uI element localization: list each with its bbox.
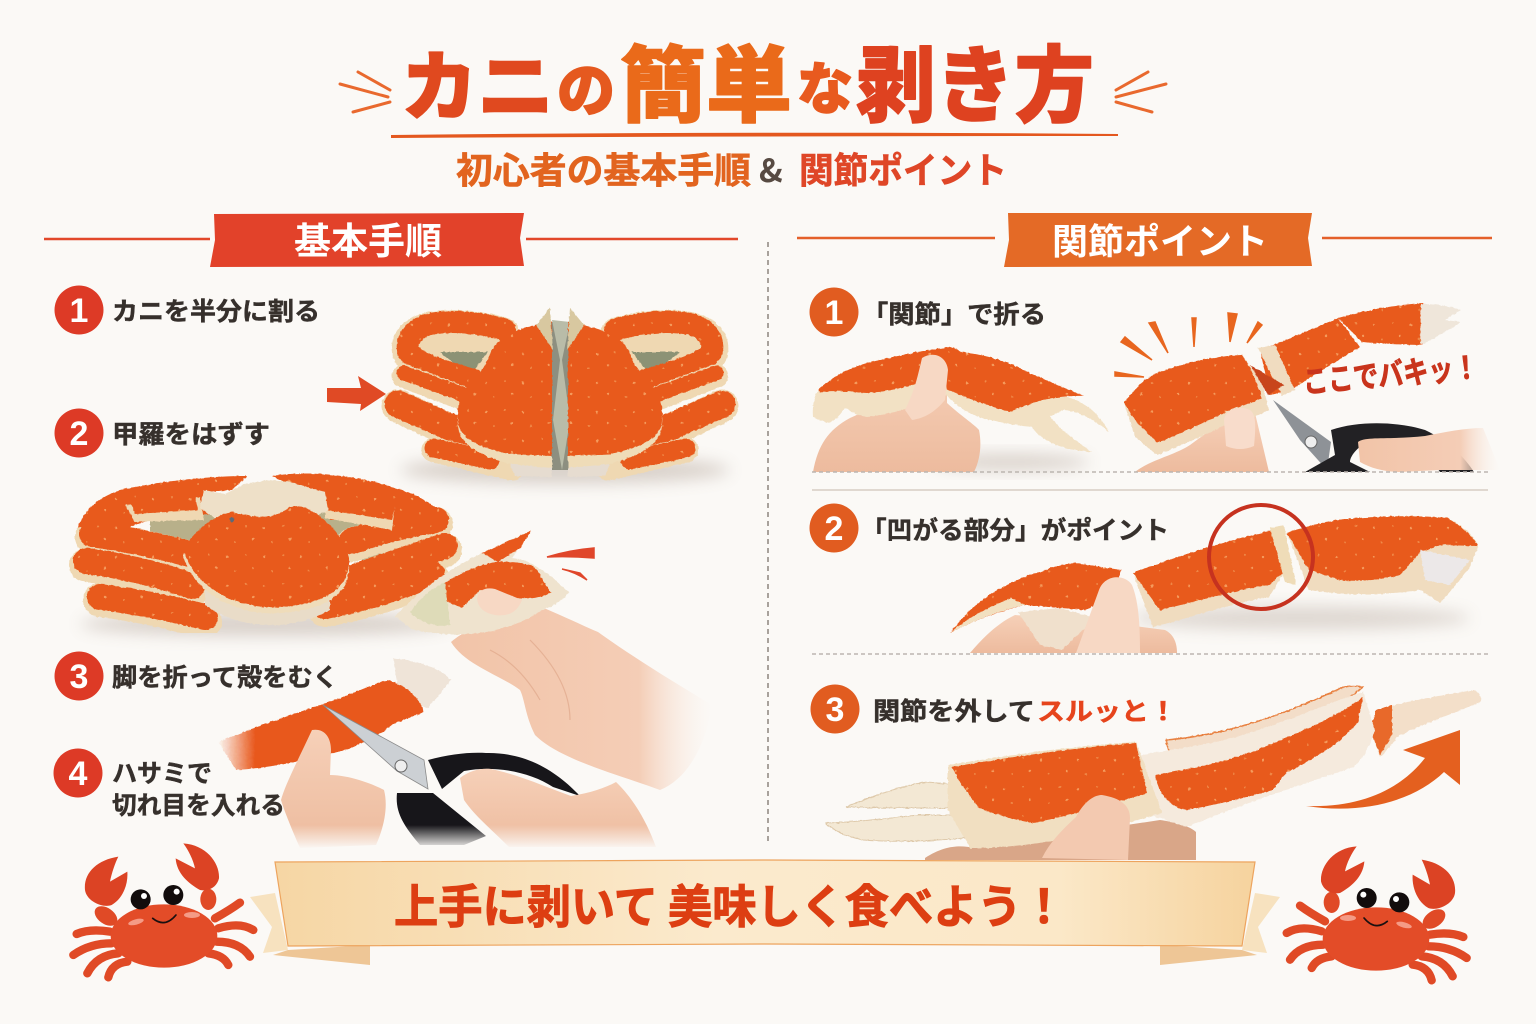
claw tips: [826, 782, 965, 841]
step 3 right: スルッと！: [1037, 692, 1177, 728]
photo: crab split in half: [398, 308, 730, 484]
heading: 関節ポイント: [1004, 213, 1312, 267]
photo: claw held by hand: [813, 347, 1109, 472]
step 3 left: [54, 652, 338, 700]
joint circle: [1209, 505, 1313, 609]
subtitle: 初心者の基本手順: [456, 142, 751, 194]
photo: hand holding claw section: [395, 531, 712, 790]
step 2 left: 甲羅をはずす: [112, 415, 270, 451]
step 1 left: [54, 286, 320, 334]
heading: 基本手順: [210, 211, 524, 267]
scissors: [1273, 400, 1331, 470]
title: [340, 19, 1166, 139]
step 3 left: 3: [70, 658, 88, 696]
photo: bending part: [950, 505, 1478, 653]
subtitle: [456, 142, 1007, 194]
arrow to split crab: [327, 376, 386, 411]
title underline: [391, 133, 1118, 138]
subtitle: &: [759, 146, 783, 192]
step 4 left: [54, 748, 285, 822]
title: 簡単: [620, 19, 792, 139]
step 3 right: 関節を外して: [873, 692, 1035, 728]
step 2 left: 2: [70, 415, 88, 453]
title: カニ: [401, 26, 554, 136]
title: 剥き方: [856, 19, 1094, 139]
step 1 right: [810, 288, 1046, 336]
subtitle: 関節ポイント: [799, 142, 1007, 194]
title: の: [557, 44, 615, 128]
title burst right: [1116, 72, 1166, 112]
title: な: [797, 45, 853, 126]
step 1 left: 1: [70, 292, 88, 330]
title burst left: [340, 72, 390, 112]
heading: 基本手順: 基本手順: [294, 211, 442, 265]
section rule: left: [44, 238, 738, 240]
step 1 right: 「関節」で折る: [862, 295, 1046, 331]
closing banner: [250, 860, 1280, 965]
step 4 left: ハサミで: [112, 754, 212, 790]
scissor blades: [323, 705, 428, 789]
step 4 left: 切れ目を入れる: [112, 786, 285, 822]
step 3 right: [810, 684, 1177, 734]
peeled shell sliver: [1166, 686, 1363, 755]
right hand: [460, 769, 656, 847]
step 2 right: 「凹がる部分」がポイント: [861, 511, 1169, 547]
photo: scissors at joint: [1124, 303, 1500, 472]
step 3 right: 3: [826, 691, 844, 729]
far tip: [1370, 690, 1481, 757]
photo: crab with shell off: [78, 473, 450, 636]
ribbon tail right: [1242, 893, 1280, 953]
heading: 関節ポイント: 関節ポイント: [1052, 213, 1268, 265]
step 4 left: 4: [69, 755, 88, 793]
section rule: right: [797, 237, 1492, 239]
banner text: 上手に剥いて 美味しく食べよう！: [394, 871, 1066, 937]
step 2 right: [810, 504, 1169, 552]
divider: [767, 242, 769, 845]
step 2 right: 2: [825, 510, 843, 548]
arrow: [1306, 730, 1460, 809]
left hand: [281, 730, 386, 848]
thumb: [1042, 795, 1130, 860]
step 1 right: 1: [825, 294, 843, 332]
hand: [925, 820, 1196, 860]
thumb: [1076, 577, 1140, 653]
shell: [948, 742, 1162, 848]
mascot crab left: [73, 843, 253, 977]
ribbon body: [275, 860, 1255, 946]
photo: pulling meat out: [826, 686, 1481, 860]
photo: scissors cutting leg: [218, 658, 670, 849]
ribbon tail left: [250, 893, 288, 953]
callout: ここでバキッ！: ここでバキッ！: [1301, 342, 1480, 402]
bottom fade: [270, 825, 670, 849]
hand behind: [1135, 413, 1269, 472]
meat: [1140, 692, 1375, 827]
motion lines: [547, 548, 594, 580]
mascot crab right: [1287, 846, 1467, 980]
step 2 left: [54, 408, 270, 458]
step 1 left: カニを半分に割る: [112, 292, 320, 328]
scissor handles: [397, 753, 580, 845]
burst lines: [1115, 313, 1262, 377]
photo dividers: [812, 471, 1488, 473]
step 3 left: 脚を折って殻をむく: [112, 658, 338, 694]
